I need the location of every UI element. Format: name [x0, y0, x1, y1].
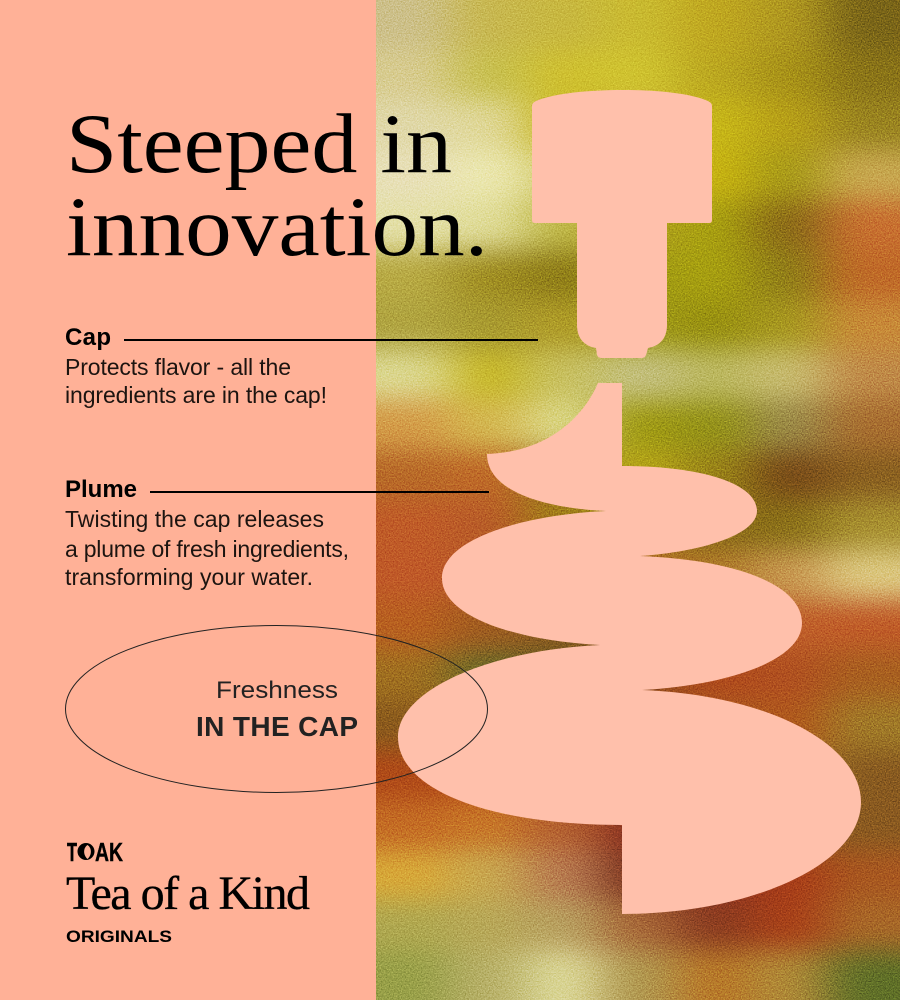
callout: plume: transforming your water. — [65, 564, 313, 590]
callout: plume: Plume — [65, 476, 137, 503]
badge: freshness in the cap — [66, 626, 488, 792]
callout: cap: ingredients are in the cap! — [65, 382, 327, 408]
callout: plume: Twisting the cap releases — [65, 506, 324, 532]
callout: cap: Protects flavor - all the — [65, 354, 291, 380]
title — [66, 97, 488, 274]
badge: freshness in the cap: Freshness — [216, 677, 338, 704]
badge: freshness in the cap: IN THE CAP — [196, 711, 358, 742]
plume shape — [398, 383, 861, 914]
logo: TOAK Tea of a Kind Originals: Tea of a Kind — [66, 867, 310, 920]
title: innovation. — [66, 180, 488, 274]
logo: TOAK Tea of a Kind Originals: AK — [95, 837, 123, 867]
panel: blurred tea gradient background — [376, 0, 900, 1000]
callout: cap — [65, 324, 538, 408]
title: Steeped in — [66, 97, 452, 191]
logo: TOAK Tea of a Kind Originals: ORIGINALS — [66, 927, 172, 946]
callout: plume: a plume of fresh ingredients, — [65, 536, 349, 562]
bottle cap shape — [532, 90, 712, 358]
left panel background — [0, 0, 376, 1000]
callout: cap: Cap — [65, 324, 111, 351]
logo: TOAK Tea of a Kind Originals: T — [67, 837, 77, 867]
logo: TOAK Tea of a Kind Originals — [66, 837, 310, 946]
callout: plume — [65, 476, 489, 590]
